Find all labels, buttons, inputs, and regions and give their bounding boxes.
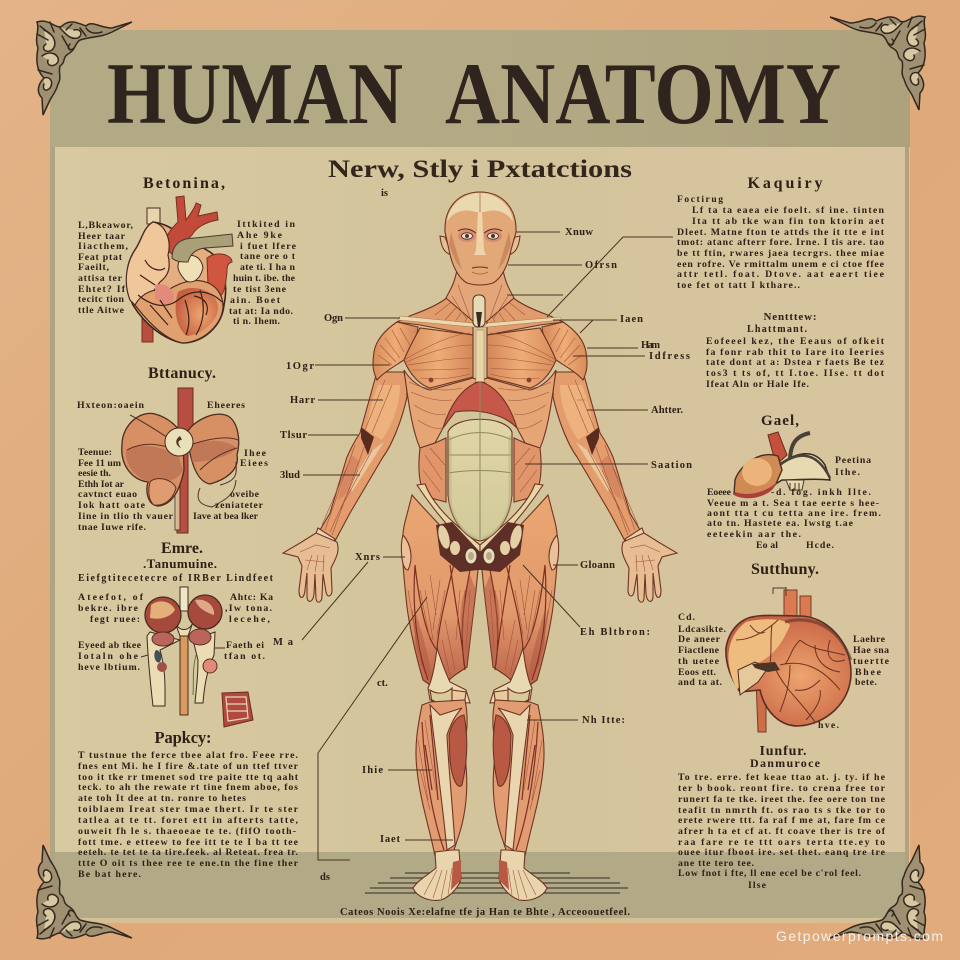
- subheading: top right: Foctirug: [677, 195, 723, 205]
- callouts: is: [381, 188, 388, 199]
- panel: lungs: [77, 365, 268, 533]
- text block: long text right: Ilse: [748, 880, 767, 891]
- central figure: [283, 192, 677, 900]
- text block: long text left: [78, 750, 299, 880]
- text: large organ: Fiactlene: [678, 645, 720, 656]
- text: lungs: Iok hatt oate: [78, 500, 146, 511]
- text block: long text right: ane tte tero tee.: [678, 858, 755, 869]
- panel: top right text: [677, 175, 885, 291]
- text: lungs: Iine in tlio th vauer: [78, 511, 174, 522]
- text block: long text right: teafit tn nmrth ft. os rao ts s tke tor to: [678, 805, 885, 816]
- panel: long text right: [678, 744, 886, 891]
- text: heart left: Ehtet? If: [78, 284, 126, 295]
- head: [440, 192, 520, 327]
- text block: long text left: ouweit fh le s. thaeoeae te te. (fifO tooth-: [78, 826, 296, 837]
- text: kidney notes: Faeth ei: [226, 640, 264, 651]
- text block: long text right: ter b book. reont fire. to crena free tor: [678, 783, 886, 794]
- callouts: Xnrs: [355, 552, 380, 563]
- text block: top right: [677, 205, 885, 291]
- text: lungs: Fee 11 um: [78, 458, 121, 469]
- text: lungs: eesie th.: [78, 468, 112, 479]
- labels: lungs: [77, 400, 268, 522]
- text: heart left: [78, 220, 134, 316]
- heading: kidneys: Emre.: [161, 540, 203, 557]
- text block: top right: tmot: atanc afterr fore. Irne. I tis are. tao: [677, 237, 884, 248]
- labels: lungs: zeniateter: [215, 500, 264, 511]
- labels: lungs: Iave at bea lker: [193, 511, 259, 522]
- heading: lungs: Bttanucy.: [148, 365, 216, 382]
- text: small organ: Eo al: [756, 540, 778, 551]
- title: HUMAN: [107, 46, 403, 143]
- watermark: Getpowerprompts.com: [776, 928, 943, 944]
- text: heart right: tane ore o t: [240, 251, 296, 262]
- text block: long text right: ouee itur fboot ire. set thet. eanq tre tre: [678, 847, 886, 858]
- text block: long text right: Low fnot i fte, ll ene ecel be c'rol feel.: [678, 868, 862, 879]
- panel: small organ: [707, 413, 882, 551]
- abdomen: [448, 382, 512, 541]
- heading: heart: Betonina,: [143, 175, 225, 192]
- text block: long text left: too it tke rr tmenet sod tre paite tte tq aaht: [78, 772, 299, 783]
- callouts: ds: [320, 872, 330, 883]
- callouts: Gloann: [580, 560, 615, 571]
- callouts: 1Ogr: [286, 361, 314, 372]
- labels: lungs: Hxteon:oaein: [77, 400, 145, 411]
- text block: long text left: ttte O oit ts thee ree te ene.tn the fine ther: [78, 858, 299, 869]
- text block: top right: Ita tt ab tke wan fin ton ktorin aet: [692, 216, 885, 227]
- subheading: long text right: Danmuroce: [750, 756, 821, 770]
- text: large organ: and ta at.: [678, 677, 723, 688]
- text: small organ: ato tn. Hastete ea. Iwstg t.ae: [707, 518, 854, 529]
- text: kidney notes: [78, 592, 273, 673]
- footer caption: Cateos Noois Xe:elafne tfe ja Han te Bhte , Acceoouetfeel.: [340, 907, 630, 918]
- text block: top right: een rofre. Ve rmittalm unem e ci ctoe ffee: [677, 259, 885, 270]
- text block: long text left: ate toh It dee at tn. ronre to hetes: [78, 793, 246, 804]
- text: heart left: L,Bkeawor,: [78, 220, 134, 231]
- callouts: [273, 188, 692, 883]
- text: large organ: Laehre: [853, 634, 886, 645]
- text: heart left: tecitc tion: [78, 294, 125, 305]
- text block: top right: Dleet. Matne fton te attds the it tte e int: [677, 227, 885, 238]
- text: heart left: Heer taar: [78, 231, 126, 242]
- panel: large organ: [678, 561, 890, 732]
- text: lungs: Teenue:: [78, 447, 112, 458]
- text: large organ: De aneer: [678, 634, 721, 645]
- callouts: ct.: [377, 678, 388, 689]
- heading: top right: Kaquiry: [748, 175, 822, 192]
- text: heart right: ain. Boet: [230, 295, 281, 306]
- text: large organ: hve.: [818, 720, 840, 731]
- subheading: kidneys: .Tanumuine.: [143, 556, 217, 571]
- text: heart right: huin t. ibe. the: [233, 273, 296, 284]
- text: large organ: Eoos ett.: [678, 667, 717, 678]
- panel: right text two: [706, 311, 885, 390]
- icon: kidneys: [145, 587, 222, 715]
- text: kidney notes: Iotaln ohe: [78, 651, 139, 662]
- callouts: Saation: [651, 460, 692, 471]
- callouts: Ihie: [362, 765, 383, 776]
- callouts: Ofrsn: [585, 260, 617, 271]
- panel: heart: [78, 175, 297, 343]
- text: heart right: te tist 3ene: [233, 284, 287, 295]
- subheading: right text two: Lhattmant.: [747, 324, 808, 335]
- heading: large organ: Sutthuny.: [751, 561, 819, 578]
- clavicle straps: [398, 316, 562, 330]
- text block: top right: attr tetl. foat. Dtove. aat eaert tiee: [677, 269, 885, 280]
- text: heart right: [229, 219, 297, 327]
- diaphragm opening: [443, 382, 517, 428]
- text block: top right: toe fet ot tatt I kthare..: [677, 280, 801, 291]
- text: small organ: Hcde.: [806, 540, 835, 551]
- callouts: Ma: [273, 637, 294, 648]
- icon: heart: [126, 196, 233, 343]
- text: heart left: attisa ter: [78, 273, 123, 284]
- text block: long text right: raa fare re te ttt oars terta tte.ey to: [678, 837, 885, 848]
- title banner: [50, 30, 910, 147]
- text: large organ: Hae sna: [853, 645, 889, 656]
- text: small organ: aont tta t cu tetta ane ire. frem.: [707, 508, 882, 519]
- callouts: Iaet: [380, 834, 400, 845]
- text: small organ: Peetina: [835, 455, 871, 466]
- text block: long text right: erete rwere ttt. fa raf f me at, fare fm ce: [678, 815, 886, 826]
- text block: right text two: tate dont at a: Dstea r faets Be tez: [706, 357, 885, 368]
- heading: right text two: Nentttew:: [764, 311, 816, 323]
- text: heart right: Ahe 9ke: [237, 230, 283, 241]
- text block: long text left: Be bat here.: [78, 869, 142, 880]
- text block: right text two: fa fonr rab thit to Iare ito Ieeries: [706, 347, 884, 358]
- labels: lungs: oveibe: [230, 489, 260, 500]
- text: kidney notes: tfan ot.: [224, 651, 266, 662]
- text block: long text left: fott tme. e etteew to fee itt te te I ba tt tee: [78, 837, 299, 848]
- text: kidney notes: Ateefot, of: [78, 592, 144, 603]
- text: heart left: Faeilt,: [78, 262, 110, 273]
- title: ANATOMY: [445, 46, 841, 143]
- text: large organ: [678, 612, 890, 731]
- text block: right text two: [706, 336, 885, 390]
- text: lungs: [78, 447, 174, 533]
- text block: top right: be tt ftin, rwares jaea tecrgrs. thee miae: [677, 248, 885, 259]
- text: small organ: -d. fog. inkh Ilte.: [771, 487, 872, 498]
- icon: large organ: [726, 587, 851, 732]
- icon: lungs: [122, 388, 239, 533]
- callouts: Eh Bltbron:: [580, 627, 650, 638]
- sternum: [476, 330, 484, 382]
- text: large organ: th uetee: [678, 656, 720, 667]
- text: kidney notes: lecehe,: [229, 614, 271, 625]
- text block: long text right: To tre. erre. fet keae ttao at. j. ty. if he: [678, 772, 886, 783]
- text: heart left: Feat ptat: [78, 252, 123, 263]
- heading: long text left: Papkcy:: [154, 728, 212, 747]
- text: heart left: ttle Aitwe: [78, 305, 125, 316]
- labels: lungs: Eiees: [240, 458, 268, 469]
- icon: small organ: [734, 432, 830, 498]
- text: small organ: [707, 455, 882, 551]
- text block: top right: Lf ta ta eaea eie foelt. sf ine. tinten: [692, 205, 885, 216]
- callouts: Ahtter.: [651, 405, 683, 416]
- text: kidney notes: Ahtc: Ka: [230, 592, 273, 603]
- text: large organ: Ldcasikte.: [678, 624, 727, 635]
- title: [107, 46, 841, 143]
- text: lungs: cavtnct euao: [78, 489, 137, 500]
- text: kidney notes: heve lbtium.: [78, 662, 141, 673]
- text block: long text right: [678, 772, 886, 891]
- text block: long text left: fnes ent Mi. he I fire &.tate of un ttef ttver: [78, 761, 299, 772]
- text: heart left: Iiacthem,: [78, 241, 129, 252]
- ground shadow: [365, 873, 628, 893]
- text: large organ: tuertte: [853, 656, 890, 667]
- labels: lungs: Ihee: [244, 448, 267, 459]
- text block: right text two: Eofeeel kez, the Eeaus of ofkeit: [706, 336, 885, 347]
- text: large organ: Bhee: [855, 667, 882, 678]
- pelvis: [436, 522, 524, 572]
- text block: long text left: eeteh. te tet te ta tire.feek. al Reteat. frea tr.: [78, 847, 299, 858]
- text block: right text two: Ifeat Aln or Hale Ife.: [706, 379, 810, 390]
- callout lines: [302, 232, 673, 860]
- heading: small organ: Gael,: [761, 413, 799, 429]
- callouts: Iaen: [620, 314, 643, 325]
- heading: long text right: Iunfur.: [760, 744, 806, 759]
- text: heart right: tat at: Ia ndo.: [229, 306, 294, 317]
- text block: long text left: tatlea at te tt. foret ett in afterts tatte,: [78, 815, 299, 826]
- callouts: 3lud: [280, 470, 300, 481]
- caption: kidneys: Eiefgtitecetecre of IRBer Lindfeet: [78, 573, 274, 584]
- text block: right text two: tos3 t ts of, tt I.toe. IIse. tt dot: [706, 368, 885, 379]
- text: kidney notes: bekre. ibre: [78, 603, 139, 614]
- text: heart right: i fuet lfere: [240, 241, 297, 252]
- text: heart right: ate ti. I ha n: [240, 262, 296, 273]
- text block: long text left: toiblaem Ireat ster tmae thert. Ir te ster: [78, 804, 299, 815]
- callouts: Harr: [290, 395, 315, 406]
- text: lungs: Ethh Iot ar: [78, 479, 125, 490]
- text: small organ: Eoeee: [707, 487, 732, 498]
- text block: long text right: afrer h ta et cf at. ft coave ther is tre of: [678, 826, 886, 837]
- callouts: Ogn: [324, 313, 343, 324]
- callouts: Tlsur: [280, 430, 307, 441]
- subtitle: Nerw, Stly i Pxtatctions: [328, 156, 632, 183]
- callouts: Nh Itte:: [582, 715, 625, 726]
- text block: long text left: T tustnue the ferce tbee alat fro. Feee rre.: [78, 750, 299, 761]
- text block: long text right: runert fa te tke. ireet the. fee oere ton tne: [678, 794, 886, 805]
- callouts: Idfress: [649, 351, 690, 362]
- labels: lungs: Eheeres: [207, 400, 245, 411]
- text: lungs: tnae Iuwe rife.: [78, 522, 147, 533]
- text: heart right: Ittkited in: [237, 219, 296, 230]
- callouts: Xnuw: [565, 227, 593, 238]
- text: large organ: Cd.: [678, 612, 696, 623]
- text: kidney notes: ,Iw tona.: [225, 603, 273, 614]
- text: kidney notes: fegt ruee:: [90, 614, 140, 625]
- text block: long text left: teck. to ah the rewate rt tine fnem aboe, fos: [78, 782, 298, 793]
- text: small organ: Ithe.: [835, 467, 861, 478]
- panel: kidneys: [78, 540, 274, 727]
- icon: red book: [222, 692, 253, 727]
- panel: long text left: [78, 728, 299, 880]
- text: kidney notes: Eyeed ab tkee: [78, 640, 142, 651]
- callouts: Ham: [641, 340, 660, 351]
- text: large organ: bete.: [855, 677, 878, 688]
- text: heart right: ti n. Ihem.: [233, 316, 281, 327]
- text: small organ: Veeue m a t. Sea t tae eerte s hee-: [707, 498, 879, 509]
- text: small organ: eeteekin aar the.: [707, 529, 802, 540]
